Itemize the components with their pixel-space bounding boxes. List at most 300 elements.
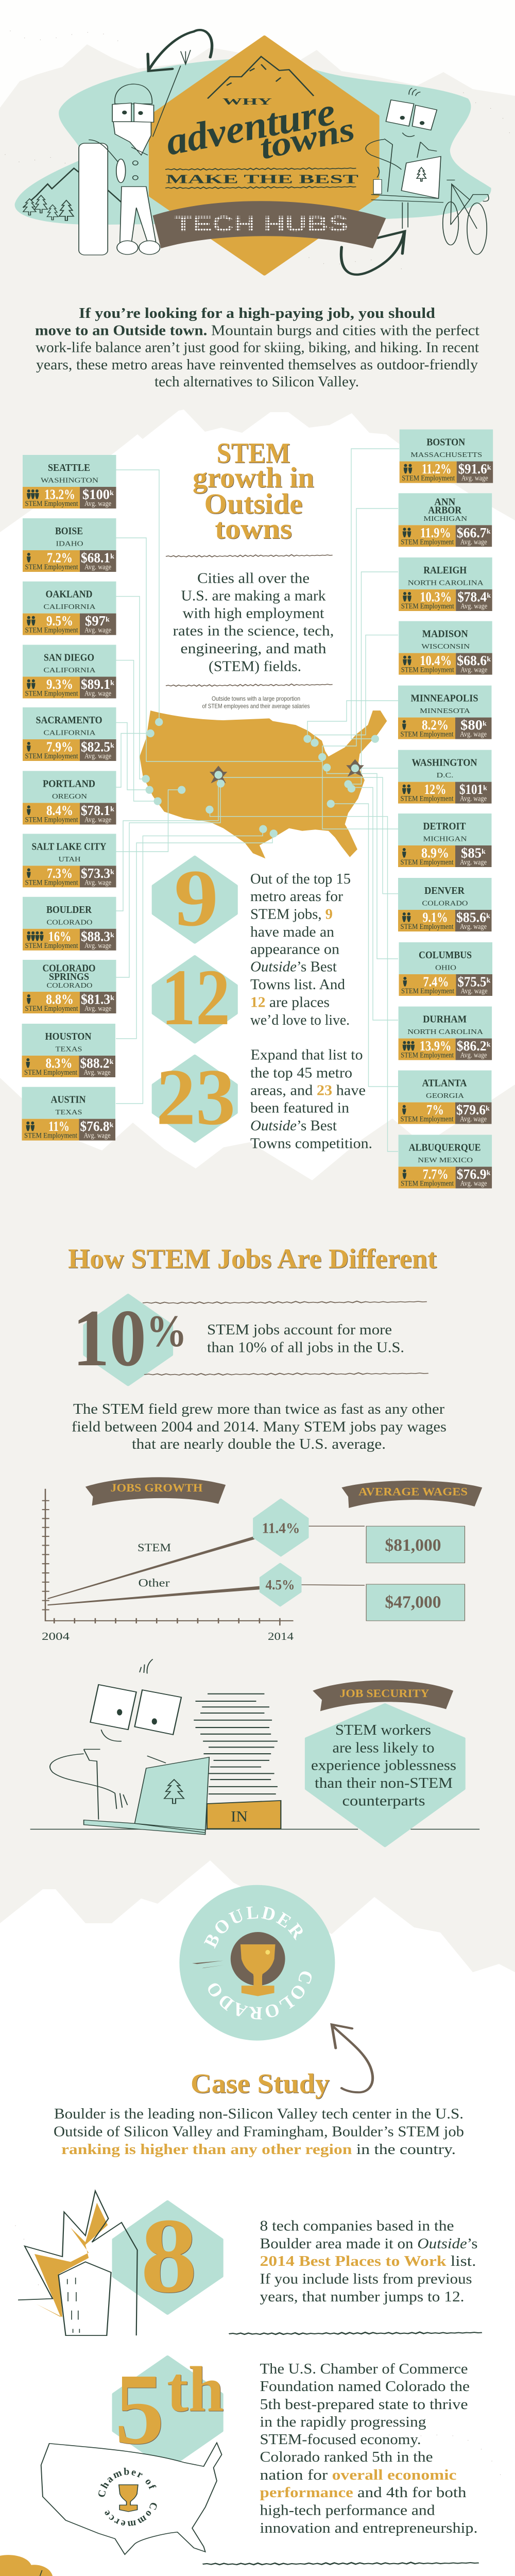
mountain line (208, 57, 314, 98)
wage (460, 717, 487, 739)
employment: 13.2% (44, 486, 75, 502)
copy: If you include lists from previous (260, 2272, 472, 2287)
card: Oakland (23, 582, 116, 635)
wage: $80 (460, 717, 483, 733)
wage (457, 525, 491, 546)
wage (458, 461, 491, 482)
employment: 11.9% (420, 525, 451, 540)
wage: Avg. wage (460, 858, 487, 867)
city: OHIO (435, 964, 456, 972)
city: DETROIT (423, 821, 466, 832)
hexagon: 4.5 (261, 1564, 301, 1606)
employment: 7.4% (423, 974, 449, 989)
wage: k (487, 528, 491, 535)
case study intro: ranking is higher than any other region in the country. (61, 2142, 456, 2158)
card: Raleigh (399, 557, 492, 611)
employment: 8.9% (421, 845, 449, 860)
title: towns: towns (256, 110, 358, 167)
city (55, 526, 83, 548)
intro copy: cities: Cities all over the (197, 571, 310, 587)
employment (401, 974, 455, 995)
wage: $75.5 (457, 974, 486, 989)
arrow to case study (332, 2025, 373, 2092)
employment (401, 910, 454, 931)
arrow top (148, 30, 212, 71)
employment: 7.9% (46, 739, 73, 754)
city: COLUMBUS (419, 950, 472, 961)
title: why: WHY (222, 96, 272, 107)
label: Other: Other (138, 1577, 170, 1589)
wage (457, 589, 491, 611)
city: AUSTIN (50, 1094, 86, 1106)
line: other growth (47, 1586, 260, 1605)
employment (401, 717, 454, 739)
card: Boise (23, 518, 116, 572)
city: BOULDER (46, 904, 92, 916)
text: top 45 metro areas: Expand that list to (250, 1047, 363, 1063)
employment: 12% (424, 782, 446, 797)
copy: than 10% of all jobs in the U.S. (207, 1340, 404, 1356)
city (50, 1094, 86, 1116)
employment: STEM Employment (25, 878, 78, 887)
stat: 12: 12 (161, 953, 230, 1042)
copy: STEM-focused economy. (260, 2432, 421, 2448)
wage: k (487, 1170, 491, 1177)
wage (80, 1118, 113, 1140)
case study intro: Boulder is the leading non-Silicon Valley tech center in the U.S. (54, 2106, 464, 2122)
badge text: Boulder: BOULDER (204, 1906, 303, 1948)
text: top 15 metro areas: metro areas for (250, 889, 344, 905)
heading: STEM growth in Outside towns: STEM (216, 437, 290, 469)
wage: $76.9 (457, 1166, 487, 1182)
title: make the best: MAKE THE BEST (166, 173, 358, 187)
card: Madison (399, 621, 492, 675)
city: DURHAM (423, 1014, 467, 1025)
wage: k (483, 785, 487, 792)
copy: innovation and entrepreneurship. (260, 2520, 478, 2536)
wage: $86.2 (457, 1038, 487, 1054)
wage: k (486, 912, 490, 920)
heading: STEM growth in Outside towns (193, 437, 314, 545)
employment: STEM Employment (24, 1132, 78, 1140)
employment: STEM Employment (401, 1052, 454, 1060)
employment: 13.9% (420, 1038, 452, 1054)
wage (456, 1102, 490, 1124)
wage: $81.3 (81, 991, 110, 1007)
employment: STEM Employment (25, 626, 78, 635)
wage: $78.1 (81, 803, 110, 818)
wage: $79.6 (456, 1102, 486, 1117)
copy: years, that number jumps to 12. (260, 2289, 465, 2305)
wage: Avg. wage (461, 474, 488, 482)
wage: $97 (85, 613, 106, 629)
employment: STEM Employment (25, 689, 78, 698)
copy: performance and 4th for both (260, 2485, 467, 2501)
suffix th: th (167, 2354, 224, 2426)
intro text: If you’re looking for a high-paying job, you should (79, 306, 435, 321)
city: COLORADO (42, 962, 96, 974)
wage (81, 991, 114, 1013)
wage: Avg. wage (460, 666, 487, 674)
wage: $85.6 (456, 910, 486, 925)
city: CALIFORNIA (43, 667, 96, 674)
city: TEXAS (56, 1046, 82, 1053)
employment (25, 991, 78, 1013)
city: ARBOR (428, 504, 462, 516)
title: tech hubs: TECH HUBS (174, 211, 348, 236)
wage: k (106, 616, 110, 624)
employment: 9.1% (422, 910, 448, 925)
copy: The U.S. Chamber of Commerce (260, 2361, 468, 2377)
city (419, 950, 472, 972)
arrow bottom (341, 231, 405, 275)
card: Denver (398, 878, 491, 931)
wage: $100 (82, 486, 110, 502)
banner label: AVERAGE WAGES (358, 1485, 468, 1498)
value: 4.5: 4.5% (266, 1577, 295, 1592)
city: NEW MEXICO (418, 1157, 473, 1164)
wage: $101 (459, 782, 483, 797)
pupils (117, 1709, 157, 1724)
wage (81, 550, 114, 571)
wage: Avg. wage (460, 1180, 487, 1188)
intro text: tech alternatives to Silicon Valley. (154, 374, 359, 390)
badge text: Colorado: COLORADO (208, 1971, 312, 2020)
copy: 5th best-prepared state to thrive (260, 2397, 468, 2413)
employment (401, 1166, 454, 1188)
laptop character (366, 88, 489, 255)
copy: Boulder area made it on Outside ’s (260, 2236, 478, 2252)
city: PORTLAND (43, 778, 95, 789)
stat: 24,000 (0, 2555, 472, 2576)
wage: Avg. wage (460, 1052, 487, 1060)
line: STEM growth (47, 1536, 254, 1599)
city (423, 496, 467, 523)
text: top 45 metro areas: Outside’s Best (250, 1118, 337, 1134)
city: ANN (434, 496, 456, 507)
employment (401, 845, 454, 867)
wage: $66.7 (457, 525, 487, 540)
label: IN: IN (231, 1808, 248, 1825)
city: IDAHO (56, 540, 83, 548)
copy (260, 2218, 478, 2305)
heading: Case Study: Case Study (191, 2068, 330, 2099)
axis label: 2014 (268, 1630, 294, 1642)
text: top 15 metro areas (250, 871, 351, 1028)
city: MASSACHUSETTS (410, 451, 482, 459)
wage: Avg. wage (460, 1115, 487, 1124)
job security copy: counterparts (342, 1793, 425, 1809)
city (423, 821, 467, 843)
wage: k (110, 489, 114, 497)
banner: job security (313, 1681, 453, 1711)
white mountain panel behind case study (0, 1860, 515, 2576)
number: 10 (73, 1293, 146, 1383)
city: BOISE (55, 526, 83, 537)
heading: STEM growth in Outside towns: Outside (204, 488, 303, 520)
copy: in the rapidly progressing (260, 2414, 426, 2430)
map markers (142, 718, 379, 838)
city: OAKLAND (45, 589, 93, 600)
book (207, 1801, 281, 1828)
employment: 8.4% (46, 803, 73, 818)
stat: 5th (40, 2352, 478, 2555)
job security copy: STEM workers (335, 1722, 431, 1738)
city (408, 565, 484, 587)
copy: STEM jobs account for more (207, 1322, 392, 1338)
city: GEORGIA (426, 1092, 465, 1100)
copy: 8 tech companies based in the (260, 2218, 454, 2234)
wage: Avg. wage (84, 1005, 111, 1013)
trophy (192, 1932, 285, 1996)
wage: k (110, 805, 114, 813)
wage: k (487, 592, 491, 600)
wage: k (483, 720, 487, 728)
security hexagon (306, 1705, 464, 1846)
employment: 10.4% (420, 653, 452, 668)
city (41, 462, 98, 484)
intro copy: cities (173, 571, 334, 675)
city (421, 629, 470, 651)
axes (42, 1489, 294, 1625)
city: COLORADO (46, 919, 93, 926)
card: Sacramento (23, 707, 116, 761)
city: SACRAMENTO (36, 715, 102, 726)
US map (140, 710, 387, 858)
wage: k (109, 1122, 113, 1129)
hero illustration (15, 30, 491, 275)
text: top 15 metro areas: 12 are places (250, 995, 330, 1011)
city (45, 1031, 92, 1053)
wage (81, 676, 114, 698)
city (32, 841, 107, 863)
city: MINNESOTA (420, 707, 471, 715)
employment: STEM Employment (401, 858, 454, 867)
wage: $91.6 (458, 461, 487, 477)
job security copy (311, 1722, 456, 1809)
employment: 9.5% (46, 613, 73, 629)
card: Durham (399, 1007, 492, 1060)
hexagons behind big numbers (153, 857, 236, 1141)
job security copy: experience joblessness (311, 1758, 456, 1774)
employment: 16% (48, 928, 71, 944)
wage (457, 1038, 491, 1060)
wage: k (487, 656, 491, 664)
box: 47000 (366, 1584, 465, 1621)
wage (80, 1055, 113, 1077)
body lines (50, 1659, 166, 1820)
wage: 81000: $81,000 (385, 1536, 441, 1555)
city (422, 885, 468, 908)
banner: jobs growth (85, 1477, 226, 1505)
city: SALT LAKE CITY (32, 841, 107, 852)
employment: STEM Employment (402, 474, 455, 482)
city: MADISON (422, 629, 468, 640)
employment: STEM Employment (401, 731, 454, 739)
city: SEATTLE (48, 462, 90, 473)
employment (25, 803, 78, 824)
box: 81000 (366, 1526, 465, 1563)
badge circle (179, 1885, 335, 2041)
text: top 45 metro areas: areas, and 23 have (250, 1083, 366, 1098)
ribbon (153, 201, 386, 248)
wage: Avg. wage (460, 731, 487, 739)
wage (84, 613, 111, 635)
city (42, 962, 96, 990)
wage: $73.3 (81, 866, 110, 881)
wage (457, 653, 491, 674)
intro text: move to an Outside town. Mountain burgs and cities with the perfect (35, 323, 479, 339)
copy: Colorado ranked 5th in the (260, 2449, 433, 2465)
city: HOUSTON (45, 1031, 92, 1042)
wage (81, 928, 114, 950)
city: WASHINGTON (41, 477, 98, 484)
case study intro: Outside of Silicon Valley and Framingham, Boulder’s STEM job (54, 2124, 464, 2140)
employment: STEM Employment (401, 1180, 454, 1188)
wage: $68.6 (457, 653, 487, 668)
heading: STEM growth in Outside towns: towns (215, 513, 292, 545)
wage (456, 910, 490, 931)
employment (25, 866, 78, 887)
city (410, 437, 482, 459)
city (46, 904, 93, 926)
card: Minneapolis (398, 686, 491, 739)
text: top 15 metro areas: STEM jobs, 9 (250, 907, 333, 923)
city (43, 652, 96, 674)
wage: k (110, 679, 114, 687)
city (411, 693, 478, 715)
employment: 8.3% (45, 1055, 72, 1071)
text: top 15 metro areas: appearance on (250, 942, 339, 957)
jobs growth chart (42, 1477, 482, 1642)
city: CALIFORNIA (43, 603, 96, 611)
heading: STEM growth in Outside towns: growth in (193, 462, 314, 494)
employment: STEM Employment (401, 923, 454, 931)
paragraph: STEM field growth (72, 1401, 447, 1452)
card: Washington DC (398, 750, 491, 804)
text: top 15 metro areas: Out of the top 15 (250, 871, 351, 887)
employment: 7% (426, 1102, 444, 1117)
city: ATLANTA (422, 1078, 467, 1089)
city (412, 757, 477, 779)
employment: 11.2% (422, 461, 452, 477)
employment: STEM Employment (401, 666, 454, 674)
employment (25, 928, 78, 950)
employment: STEM Employment (401, 538, 454, 546)
wage: $88.2 (80, 1055, 109, 1071)
wage: k (110, 931, 114, 939)
employment: 7.7% (423, 1166, 449, 1182)
employment (401, 525, 454, 546)
employment (24, 1055, 78, 1077)
wage: $82.5 (81, 739, 110, 754)
wage: k (487, 464, 491, 472)
city: DENVER (424, 885, 465, 896)
paragraph: STEM field growth: The STEM field grew more than twice as fast as any other (73, 1401, 445, 1417)
wage: k (109, 1058, 113, 1066)
employment (25, 613, 78, 635)
seal text: Commerce (105, 2503, 157, 2526)
city: NORTH CAROLINA (408, 579, 484, 587)
wage: Avg. wage (460, 987, 488, 995)
wage (457, 1166, 491, 1188)
wage: Avg. wage (460, 602, 487, 611)
city: CALIFORNIA (43, 730, 96, 737)
paragraph: STEM field growth: field between 2004 and 2014. Many STEM jobs pay wages (72, 1419, 447, 1435)
hexagon and state outline (41, 2357, 222, 2554)
wage: k (110, 742, 114, 750)
stat: 9: 9 (174, 853, 218, 943)
card: Seattle (23, 455, 116, 509)
teal blob (15, 59, 491, 225)
heading: How STEM Jobs Are Different: How STEM Jobs Are Different (68, 1243, 437, 1274)
Boulder badge (179, 1885, 335, 2041)
wage: Avg. wage (83, 1069, 111, 1077)
text: top 45 metro areas: the top 45 metro (250, 1065, 352, 1081)
city: D.C. (437, 772, 453, 779)
intro text: work-life balance aren’t just good for skiing, biking, and hiking. In recent (36, 340, 479, 356)
hexagon (85, 1295, 171, 1385)
employment (25, 486, 78, 508)
label: STEM: STEM (138, 1541, 171, 1554)
employment: STEM Employment (401, 602, 454, 611)
card: San Diego (23, 645, 116, 699)
intro copy: cities: (STEM) fields. (209, 658, 301, 675)
wage: k (486, 1105, 490, 1113)
employment: STEM Employment (25, 500, 78, 508)
wage: Avg. wage (84, 942, 111, 950)
employment: STEM Employment (401, 1115, 454, 1124)
tree logo (164, 1780, 184, 1804)
paragraph: STEM field growth: that are nearly double the U.S. average. (132, 1436, 386, 1452)
city: MINNEAPOLIS (411, 693, 478, 704)
banner: average wages (341, 1481, 482, 1508)
wage: Avg. wage (84, 816, 111, 824)
employment (401, 1038, 454, 1060)
city (407, 1014, 484, 1036)
card: Boulder (23, 897, 116, 951)
laptop (84, 1757, 209, 1835)
city: BOSTON (426, 437, 466, 448)
card: Ann Arbor (399, 493, 492, 547)
wage: Avg. wage (84, 500, 111, 508)
wage: $76.8 (80, 1118, 109, 1134)
text: top 45 metro areas (250, 1047, 372, 1152)
employment: 7.2% (47, 550, 73, 566)
employment: 8.2% (422, 717, 449, 733)
card: Detroit (398, 814, 491, 867)
case study intro (54, 2106, 464, 2158)
wage: Avg. wage (84, 878, 111, 887)
intro text: years, these metro areas have reinvented themselves as outdoor-friendly (36, 357, 478, 373)
employment: STEM Employment (24, 1069, 78, 1077)
number 5: 5 (115, 2352, 164, 2465)
wage: $88.3 (81, 928, 110, 944)
left mountain and trees (23, 168, 122, 221)
city: RALEIGH (423, 565, 467, 576)
employment: STEM Employment (401, 987, 455, 995)
job security copy: than their non-STEM (315, 1775, 453, 1791)
employment (24, 1118, 78, 1140)
wage: Avg. wage (84, 563, 111, 571)
card: Portland (23, 771, 116, 824)
employment (25, 550, 78, 571)
axis label: 2004 (42, 1630, 70, 1642)
title lockup (163, 90, 358, 236)
city: COLORADO (46, 982, 93, 990)
city: TEXAS (56, 1109, 82, 1116)
employment: STEM Employment (25, 563, 78, 571)
